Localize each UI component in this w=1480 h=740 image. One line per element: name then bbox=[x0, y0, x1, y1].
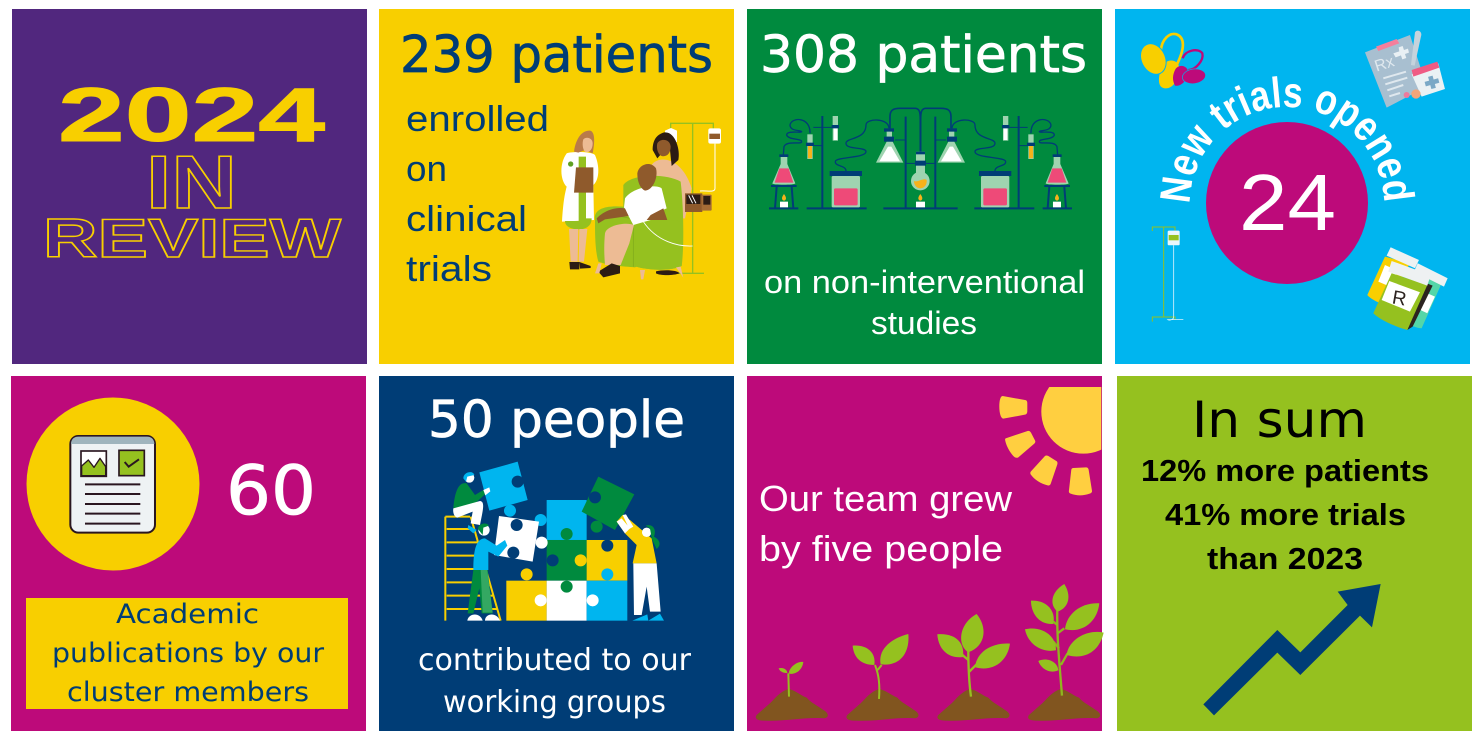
text: summary statistics bbox=[1141, 453, 1429, 576]
icons: pills, prescription, drip, bottles bbox=[1136, 31, 1448, 330]
title: 2024: 2024 bbox=[58, 73, 325, 158]
text: summary statistics: 12% more patients bbox=[1141, 453, 1429, 488]
panel: academic publications bbox=[11, 376, 366, 731]
text: on non-interventional studies: on non-interventional bbox=[764, 264, 1085, 300]
icon: sun bbox=[999, 387, 1102, 496]
text: on non-interventional studies bbox=[764, 264, 1085, 341]
title: IN: IN bbox=[146, 140, 237, 224]
text: contributed to our working groups bbox=[418, 643, 692, 720]
text: our team grew by five people bbox=[759, 478, 1013, 569]
circle with number 24: 24 bbox=[1239, 158, 1336, 247]
heading: in sum: In sum bbox=[1192, 391, 1367, 449]
curved heading: New trials opened bbox=[1190, 107, 1384, 204]
yellow label: academic publications: publications by our bbox=[52, 638, 325, 669]
text: enrolled on clinical trials: on bbox=[406, 148, 447, 189]
icon: prescription clipboard: Rx bbox=[1373, 53, 1396, 75]
panel: 50 people bbox=[379, 376, 734, 731]
icon: pills bbox=[1136, 34, 1207, 88]
panel: 2024 in review bbox=[12, 9, 367, 364]
illustration: laboratory glassware bbox=[769, 108, 1072, 208]
yellow label: academic publications: cluster members bbox=[67, 677, 309, 708]
illustration: sun and seedlings bbox=[756, 387, 1104, 721]
text: on non-interventional studies: studies bbox=[871, 305, 977, 341]
text: summary statistics: than 2023 bbox=[1207, 541, 1363, 576]
yellow label: academic publications: Academic bbox=[116, 599, 259, 630]
seedling 3 bbox=[937, 614, 1010, 721]
yellow circle with document icon bbox=[26, 398, 200, 570]
icon: drip stand bbox=[1152, 227, 1183, 322]
text: our team grew by five people: by five people bbox=[759, 528, 1003, 569]
illustration: doctor, patient and nurse bbox=[561, 123, 721, 279]
text: contributed to our working groups: working groups bbox=[443, 685, 666, 720]
text: enrolled on clinical trials: clinical bbox=[406, 198, 527, 239]
heading: 239 patients: 239 patients bbox=[400, 26, 713, 85]
yellow label: academic publications bbox=[26, 598, 348, 709]
text: summary statistics: 41% more trials bbox=[1165, 497, 1406, 532]
panel: new trials opened: New trials opened bbox=[1160, 76, 1416, 202]
text: enrolled on clinical trials: enrolled bbox=[406, 98, 549, 139]
text: enrolled on clinical trials: trials bbox=[406, 248, 492, 289]
circle with number 24 bbox=[1206, 122, 1368, 284]
panel: in sum bbox=[1117, 376, 1472, 731]
icon: medicine bottles: R bbox=[1391, 287, 1408, 311]
text: our team grew by five people: Our team grew bbox=[759, 478, 1013, 519]
heading: 308 patients: 308 patients bbox=[760, 26, 1087, 85]
number: 60: 60 bbox=[226, 452, 316, 531]
panel: 308 patients bbox=[747, 9, 1102, 364]
seedling 2 bbox=[846, 634, 918, 721]
icon: medicine bottles bbox=[1367, 247, 1448, 330]
heading: 50 people: 50 people bbox=[428, 391, 685, 450]
title: REVIEW: REVIEW bbox=[43, 207, 341, 269]
seedling 1 bbox=[756, 662, 828, 721]
panel: new trials opened bbox=[1115, 9, 1470, 364]
arrow: upward trend bbox=[1203, 584, 1381, 715]
panel: team growth bbox=[747, 370, 1125, 731]
illustration: people assembling puzzle bbox=[445, 462, 664, 621]
panel: 239 patients bbox=[379, 9, 734, 364]
seedling 4 bbox=[1025, 584, 1104, 721]
text: enrolled on clinical trials bbox=[406, 98, 549, 289]
icon: prescription clipboard bbox=[1365, 31, 1445, 108]
text: contributed to our working groups: contributed to our bbox=[418, 643, 692, 678]
